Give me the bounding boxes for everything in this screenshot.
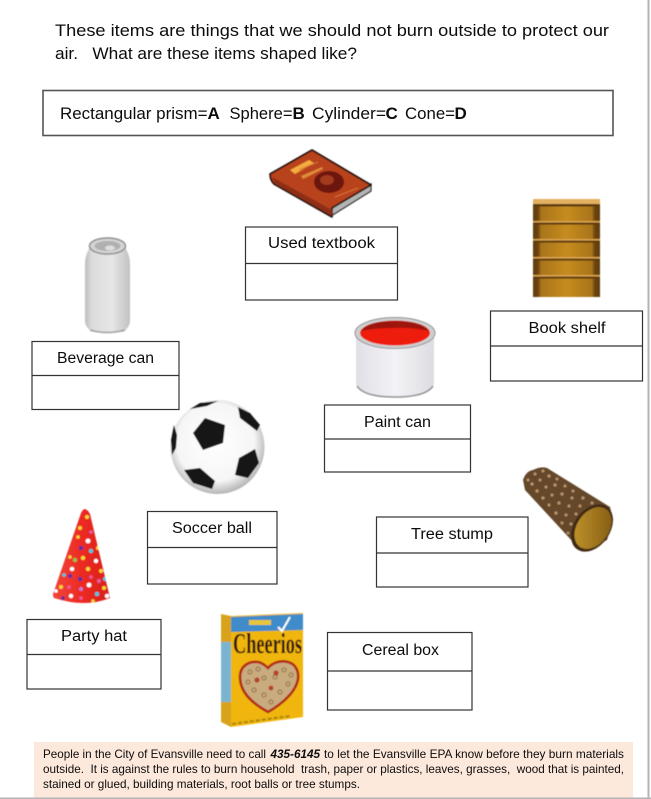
label box: cereal box: Cereal box (362, 642, 439, 659)
footer note panel: to let the Evansville EPA know before they burn materials (324, 747, 624, 761)
legend: shape key: C (386, 104, 398, 123)
label box: cereal box (328, 632, 472, 710)
footer note panel: outside. It is against the rules to burn household trash, paper or plastics, leaves, grasses, wood that is painted, (43, 762, 624, 776)
label box: party hat (27, 620, 161, 689)
label box: beverage can: Beverage can (57, 350, 154, 367)
label box: tree stump (376, 517, 528, 587)
label box: paint can: Paint can (364, 414, 431, 431)
legend: shape key: A (208, 104, 220, 123)
footer note panel: People in the City of Evansville need to call (43, 747, 266, 761)
icon: beverage can (85, 238, 130, 332)
footer note panel: 435-6145 (270, 747, 320, 761)
icon: tree stump (522, 466, 614, 552)
label box: paint can (324, 405, 470, 472)
icon: paint can (355, 318, 435, 398)
legend: shape key: Rectangular prism= (60, 104, 208, 123)
icon: book shelf (533, 199, 600, 297)
title: air. What are these items shaped like? (55, 44, 357, 63)
legend: shape key: B (292, 104, 305, 123)
title: These items are things that we should not burn outside to protect our (55, 21, 609, 40)
footer note panel (34, 742, 633, 798)
legend: shape key: Sphere= (230, 104, 293, 123)
label box: soccer ball: Soccer ball (172, 520, 252, 537)
label box: party hat: Party hat (61, 628, 128, 645)
icon: cereal box (221, 613, 303, 727)
icon: textbook (270, 150, 371, 217)
label box: tree stump: Tree stump (411, 526, 493, 543)
icon: soccer ball (170, 400, 264, 494)
legend: shape key: D (454, 104, 467, 123)
legend: shape key: Cylinder= (312, 104, 386, 123)
legend: shape key (43, 90, 613, 136)
label box: used textbook (246, 227, 398, 300)
cereal brand name: Cheerios (233, 628, 302, 660)
label box: book shelf: Book shelf (528, 320, 606, 337)
label box: used textbook: Used textbook (268, 235, 375, 252)
legend: shape key: Cone= (405, 104, 455, 123)
footer note panel: stained or glued, building materials, root balls or tree stumps. (43, 777, 360, 791)
icon: party hat (53, 509, 110, 603)
label box: soccer ball (148, 512, 277, 584)
title (55, 21, 609, 63)
label box: beverage can (32, 342, 179, 410)
label box: book shelf (490, 311, 642, 381)
